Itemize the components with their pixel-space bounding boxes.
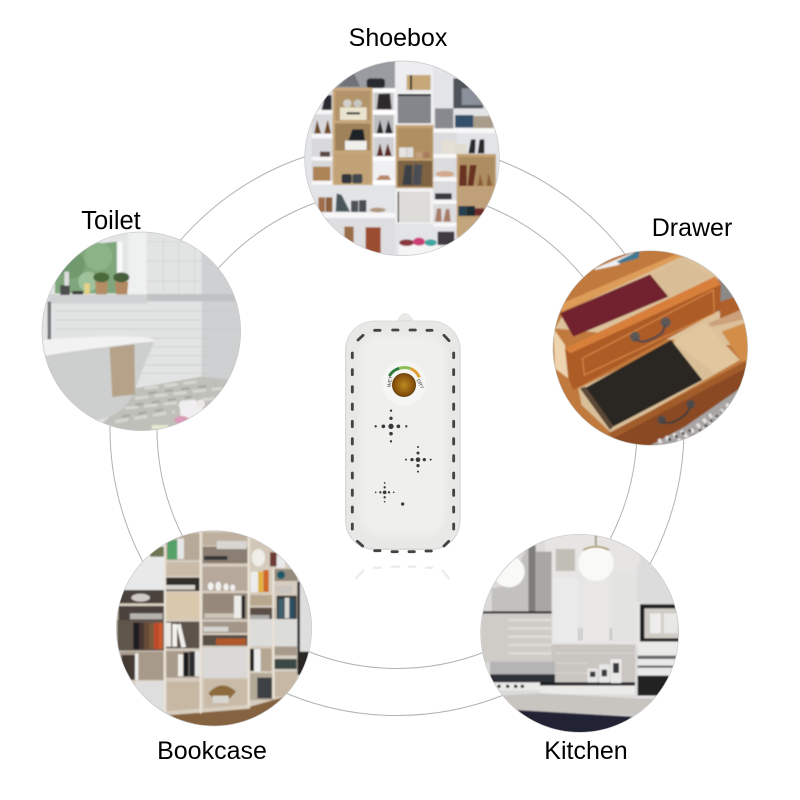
connecting rings [110,142,684,716]
canisters [587,668,598,682]
label: Kitchen: Kitchen [544,737,628,765]
dot patterns [374,409,432,506]
gauge: WET [386,376,395,388]
microwave [640,604,680,642]
col 4 [250,538,273,566]
window sill items [60,285,70,295]
wood column left [333,88,373,185]
white cubbies [372,88,396,185]
lower drawer front [614,363,746,445]
label: Bookcase: Bookcase [157,737,267,765]
device body [345,313,461,550]
right [433,128,495,133]
pendant lamps [595,534,597,549]
label: Toilet: Toilet [81,207,141,235]
photo: kitchen [480,534,679,733]
lower-left shelf [320,213,395,218]
device: moisture indicator [345,313,461,578]
top drawer front [565,277,721,390]
hood [528,545,536,613]
col 3 [203,532,249,546]
label: Drawer: Drawer [652,214,732,242]
lower open drawer interior [578,342,740,433]
shelves lines [165,532,273,717]
island [503,693,654,716]
photo: bookcase [116,530,312,726]
col 2 [165,533,202,560]
photo: toilet bathroom [42,232,241,431]
device reflection [356,567,449,578]
stove [490,662,555,674]
stitched dashes [352,330,454,552]
floor [102,376,228,430]
teddy [179,400,204,418]
window [128,232,146,294]
gauge: DRY [415,378,425,391]
faucet [48,302,51,340]
towel [110,344,135,397]
photo: shoebox shelves [304,60,500,256]
center tall [396,92,433,125]
backsplash [482,614,552,663]
counter [540,682,635,686]
photo: drawer [552,250,748,446]
label: Shoebox: Shoebox [349,24,448,52]
gauge [382,361,426,405]
tub [42,336,154,420]
right ovens [638,642,681,698]
rug [649,388,738,445]
